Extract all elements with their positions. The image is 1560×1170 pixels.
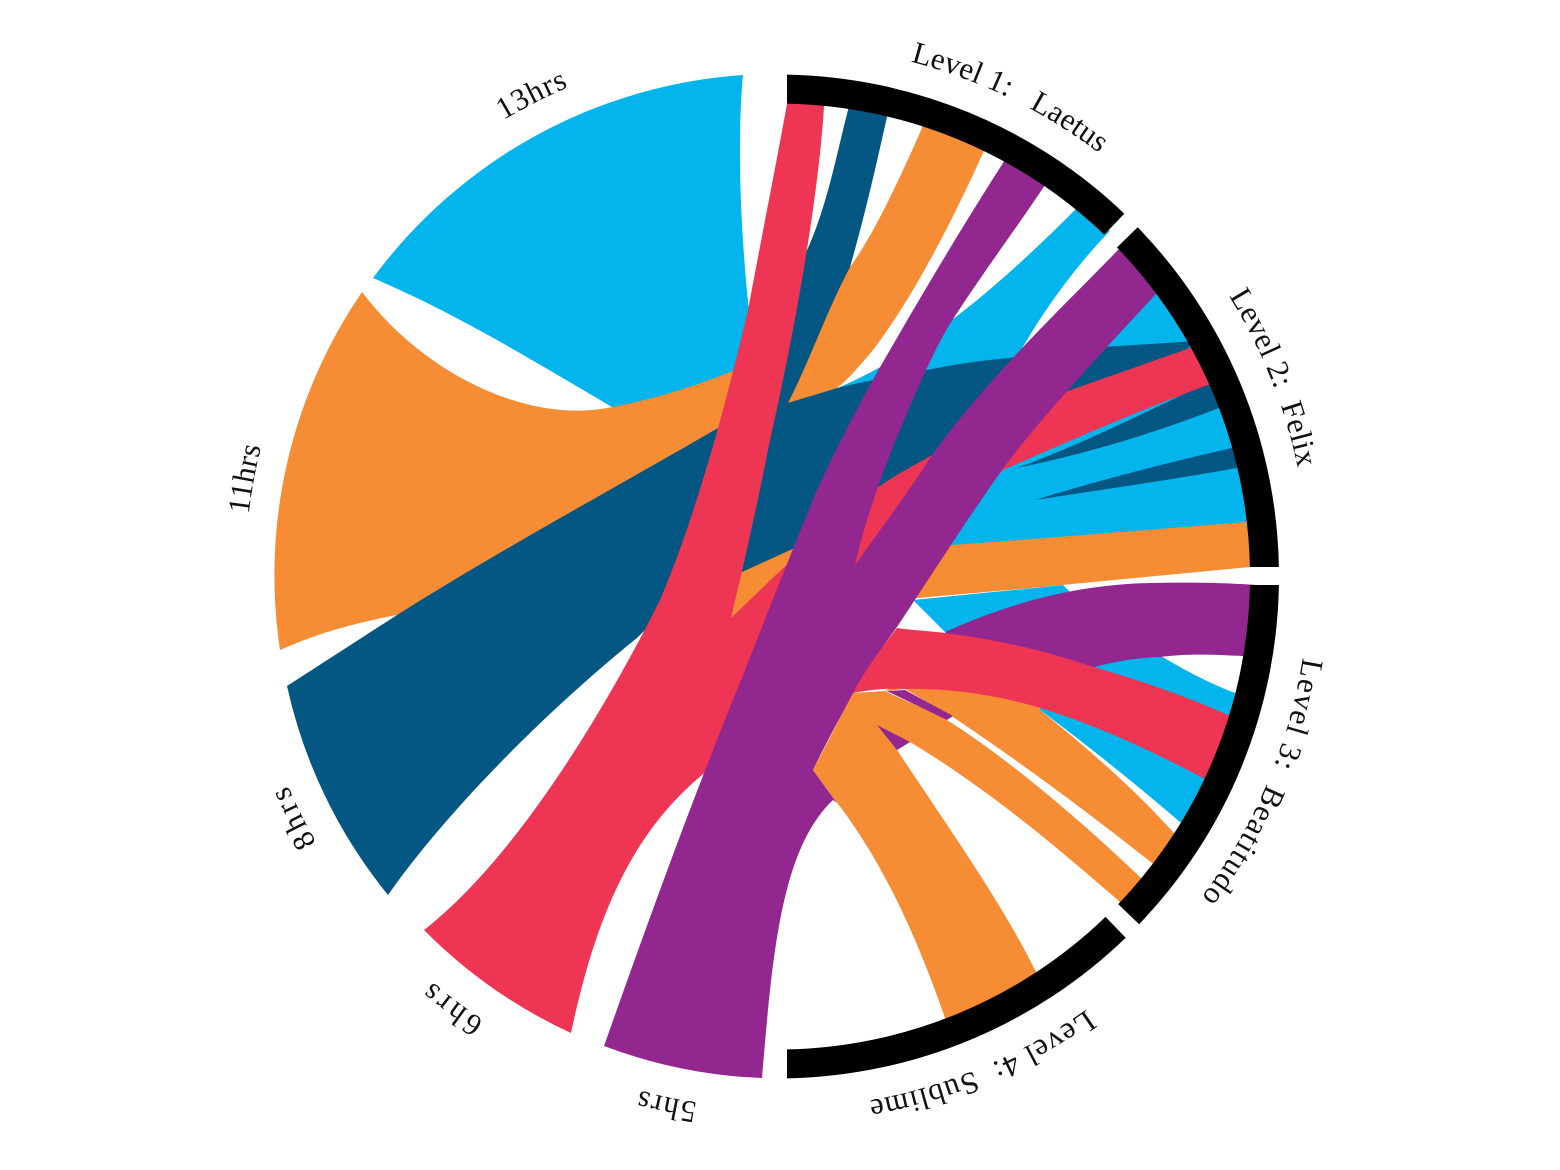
label: 13hrs: 13hrs [497,75,566,119]
ribbon: 11hrs to Level 2 [728,521,1257,622]
small purple slivers [877,690,953,750]
label: Level 1: Level 1: Laetus [912,42,1106,151]
ribbon: 8hrs dark blue [287,341,1197,895]
ribbon: 11hrs to Level 1 [788,120,987,403]
arc: Level 3 [1118,585,1279,924]
ribbon: 11hrs orange [274,292,790,650]
label: 8hrs: 8hrs [276,788,314,850]
ribbon: 5hrs purple [604,155,1162,1078]
arc: Level 2 [1117,227,1279,567]
arc: Level 1 [787,75,1124,235]
label: Level 2: Level 2: Felix [1230,286,1314,468]
label: 11hrs: 11hrs [230,445,260,512]
wedges: 8hrs to Level 2 [1017,379,1244,500]
ribbon: 5hrs to Level 3 [945,583,1257,668]
arc: Level 4 [787,917,1126,1078]
ribbon: 11hrs to Level 3 upper [885,680,1180,868]
label: 6hrs: 6hrs [425,984,480,1034]
ribbon: 11hrs to Level 3 lower and Level 4 [813,691,1147,1025]
ribbon: 8hrs to Level 1 [760,102,889,420]
ribbon: 6hrs red [424,97,1216,1033]
ribbon: 6hrs to Level 3 [853,628,1236,782]
label: 5hrs: 5hrs [638,1092,696,1122]
label: Level 3: Level 3: Beatitudo [1204,658,1323,903]
label: Level 4: Level 4: Sublime [870,1010,1098,1114]
ribbons: 13hrs cyan [373,75,1254,827]
